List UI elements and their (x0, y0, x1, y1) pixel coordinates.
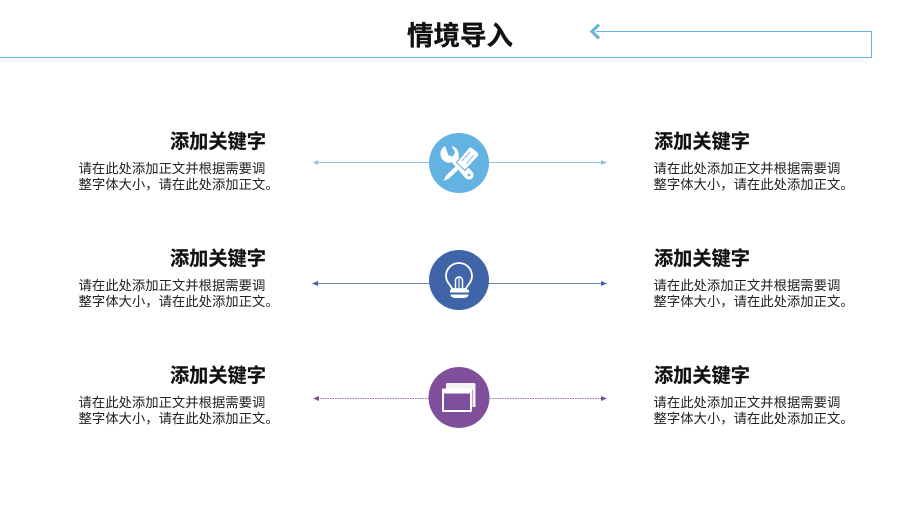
left text block row 3 (78, 365, 279, 426)
icon: tools (429, 133, 489, 193)
bulb base (450, 290, 469, 298)
icon: windows (428, 367, 490, 428)
heading: 添加关键字 (654, 366, 750, 387)
heading: 添加关键字 (654, 249, 750, 270)
body text (78, 395, 279, 426)
left text block row 1 (78, 131, 279, 192)
row 1 connector arrow (313, 160, 607, 165)
right text block row 2 (654, 248, 854, 309)
body text: 整字体大小，请在此处添加正文。 (78, 411, 279, 426)
body text: 请在此处添加正文并根据需要调 (78, 278, 265, 293)
body text: 整字体大小，请在此处添加正文。 (78, 177, 279, 192)
body text (78, 278, 279, 309)
body text: 请在此处添加正文并根据需要调 (78, 395, 265, 410)
right text block row 3 (654, 365, 854, 426)
heading: 添加关键字 (170, 366, 266, 387)
body text (78, 161, 279, 192)
body text: 请在此处添加正文并根据需要调 (654, 278, 840, 293)
body text: 整字体大小，请在此处添加正文。 (654, 411, 854, 426)
row 3 connector arrow (313, 396, 607, 401)
body text: 请在此处添加正文并根据需要调 (78, 161, 265, 176)
body text: 整字体大小，请在此处添加正文。 (654, 177, 854, 192)
body text: 请在此处添加正文并根据需要调 (654, 395, 840, 410)
heading: 添加关键字 (654, 132, 750, 153)
icon: light bulb (429, 250, 489, 310)
title: 情境导入 (407, 21, 513, 51)
body text: 整字体大小，请在此处添加正文。 (654, 294, 854, 309)
bulb outline glyph (446, 263, 472, 289)
body text (654, 395, 854, 426)
body text: 整字体大小，请在此处添加正文。 (78, 294, 279, 309)
front window (442, 388, 472, 412)
body text (654, 161, 854, 192)
header frame line with arrow (0, 24, 872, 58)
heading: 添加关键字 (170, 132, 266, 153)
left text block row 2 (78, 248, 279, 309)
back window (446, 383, 476, 407)
screwdriver glyph (444, 147, 479, 181)
body text (654, 278, 854, 309)
heading: 添加关键字 (170, 249, 266, 270)
row 2 connector arrow (312, 281, 607, 286)
wrench glyph (440, 146, 474, 180)
right text block row 1 (654, 131, 854, 192)
body text: 请在此处添加正文并根据需要调 (654, 161, 840, 176)
